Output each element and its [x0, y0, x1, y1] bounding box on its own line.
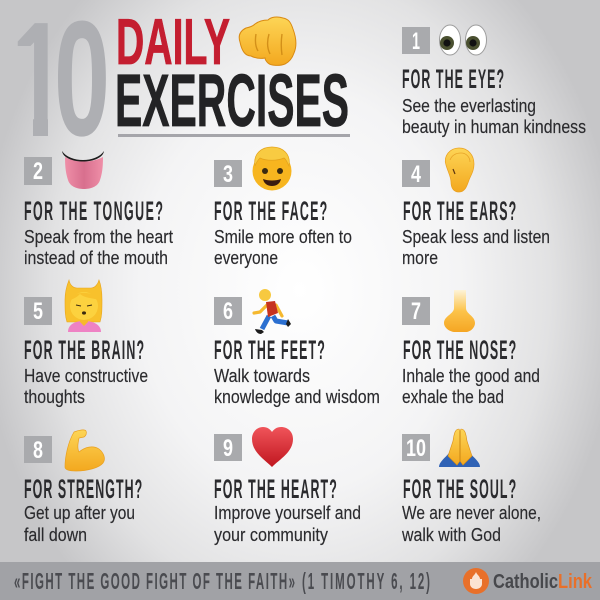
description: exhale the bad	[402, 387, 504, 407]
logo: CatholicLink: Catholic	[493, 571, 558, 593]
description	[214, 503, 361, 545]
item 10: soul	[401, 429, 541, 545]
heading: FOR THE TONGUE?	[24, 197, 163, 226]
item 8: strength	[24, 430, 142, 545]
logo: CatholicLink	[463, 568, 593, 594]
description	[401, 503, 541, 545]
description: Inhale the good and	[402, 366, 540, 386]
description	[402, 227, 550, 268]
icon: praying hands	[439, 429, 480, 467]
badge 5: 5	[33, 298, 43, 325]
heading: FOR STRENGTH?	[24, 475, 142, 504]
description	[24, 227, 173, 268]
heading: FOR THE HEART?	[214, 475, 337, 504]
description: instead of the mouth	[24, 248, 168, 268]
description	[402, 366, 540, 407]
scripture reference: (1 TIMOTHY 6, 12)	[302, 569, 430, 594]
footer band	[0, 562, 600, 600]
icon: eyes	[440, 25, 486, 55]
badge 6	[214, 297, 242, 325]
heading: FOR THE SOUL?	[403, 475, 516, 504]
description: Speak from the heart	[24, 227, 173, 247]
badge 9	[214, 434, 242, 462]
icon: heart	[252, 427, 293, 467]
badge 7: 7	[411, 298, 421, 325]
badge 10: 10	[406, 435, 426, 462]
icon: runner	[254, 289, 291, 334]
badge 4	[402, 160, 430, 188]
badge 9: 9	[223, 435, 233, 462]
badge 4: 4	[411, 161, 421, 188]
heading: FOR THE FACE?	[214, 197, 327, 226]
big number 10	[18, 20, 106, 137]
description: Speak less and listen	[402, 227, 550, 247]
description: Smile more often to	[214, 227, 352, 247]
description	[24, 366, 148, 407]
description: knowledge and wisdom	[214, 387, 380, 407]
scripture quote: «FIGHT THE GOOD FIGHT OF THE FAITH»	[14, 569, 295, 594]
badge 8: 8	[33, 437, 43, 464]
description: more	[402, 248, 438, 268]
description	[402, 96, 586, 137]
description: We are never alone,	[402, 503, 541, 523]
icon: flexed bicep	[65, 430, 104, 471]
heading: FOR THE EYE?	[402, 65, 504, 94]
description	[24, 503, 135, 545]
icon: nose	[444, 290, 475, 332]
description	[214, 366, 380, 407]
item 7: nose	[402, 290, 540, 407]
description	[214, 227, 352, 268]
description: everyone	[214, 248, 278, 268]
item 9: heart	[214, 427, 361, 545]
item 2: tongue	[24, 151, 173, 268]
title	[18, 18, 350, 137]
description: thoughts	[24, 387, 85, 407]
icon: woman getting massage	[65, 280, 102, 332]
icon: man face	[252, 147, 292, 190]
description: See the everlasting	[402, 96, 536, 116]
description: your community	[214, 525, 328, 545]
heading: FOR THE BRAIN?	[24, 336, 144, 365]
badge 1	[402, 27, 430, 55]
heading: FOR THE NOSE?	[403, 336, 516, 365]
badge 1: 1	[412, 28, 420, 55]
item 5: brain	[24, 280, 148, 407]
description: Get up after you	[24, 503, 135, 523]
badge 2: 2	[33, 158, 43, 185]
item 6: feet	[214, 289, 380, 407]
icon: ear	[445, 148, 474, 192]
description: Improve yourself and	[214, 503, 361, 523]
icon: fist	[239, 17, 296, 65]
item 3: face	[214, 147, 352, 268]
heading: daily: DAILY	[116, 5, 230, 78]
description: walk with God	[401, 525, 501, 545]
item 1: eye	[402, 25, 586, 137]
description: fall down	[24, 525, 87, 545]
logo: CatholicLink: Link	[558, 571, 593, 593]
description: Walk towards	[214, 366, 310, 386]
badge 2	[24, 157, 52, 185]
item 4: ears	[402, 148, 550, 268]
icon: tongue	[62, 151, 104, 189]
heading: FOR THE FEET?	[214, 336, 325, 365]
heading: FOR THE EARS?	[403, 197, 516, 226]
badge 3: 3	[223, 161, 233, 188]
heading: exercises: EXERCISES	[115, 59, 349, 142]
badge 6: 6	[223, 298, 233, 325]
description: Have constructive	[24, 366, 148, 386]
